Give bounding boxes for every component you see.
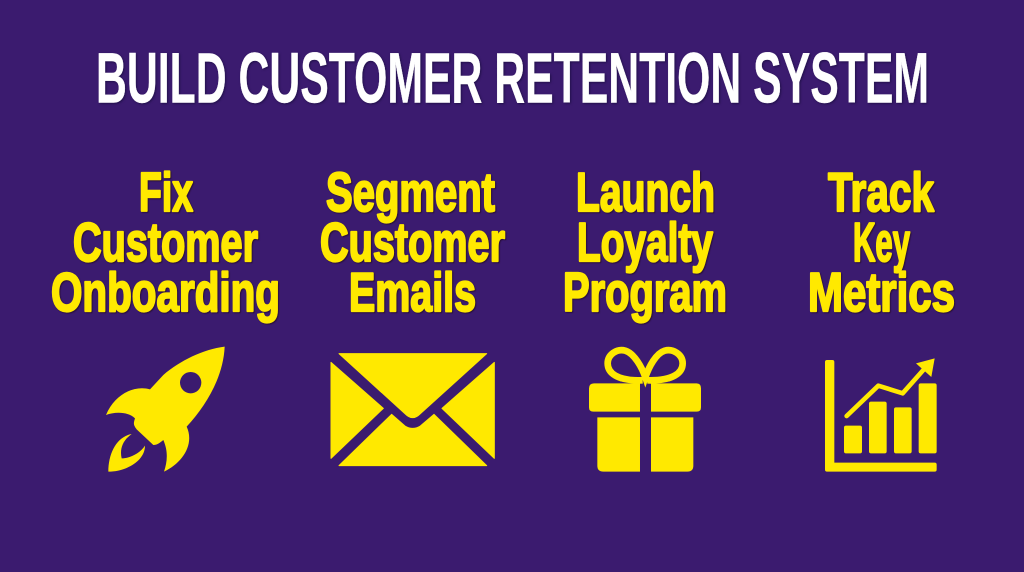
panel: launch loyalty program <box>563 161 727 472</box>
heading: segment customer emails: Segment <box>326 161 495 223</box>
icon: gift box <box>589 350 701 472</box>
panel: track key metrics <box>808 161 955 472</box>
heading: track key metrics: Track <box>828 161 934 223</box>
heading: launch loyalty program <box>563 161 727 323</box>
icon: rocket <box>106 347 225 472</box>
heading: track key metrics: Metrics <box>808 261 955 323</box>
heading: fix customer onboarding: Fix <box>139 161 193 223</box>
heading: fix customer onboarding: Customer <box>73 211 258 273</box>
heading: launch loyalty program: Program <box>563 261 727 323</box>
heading: fix customer onboarding <box>51 161 280 323</box>
heading: launch loyalty program: Loyalty <box>577 211 713 273</box>
heading: segment customer emails: Emails <box>349 261 476 323</box>
heading: segment customer emails: Customer <box>320 211 505 273</box>
heading: segment customer emails <box>320 161 505 323</box>
icon: growth chart <box>825 358 937 472</box>
heading: track key metrics: Key <box>853 211 910 273</box>
heading: launch loyalty program: Launch <box>576 161 715 223</box>
panel: segment customer emails <box>320 161 505 466</box>
heading: track key metrics <box>808 161 955 323</box>
heading: fix customer onboarding: Onboarding <box>51 261 280 323</box>
icon: envelope <box>331 354 494 466</box>
panel: fix customer onboarding <box>51 161 280 472</box>
